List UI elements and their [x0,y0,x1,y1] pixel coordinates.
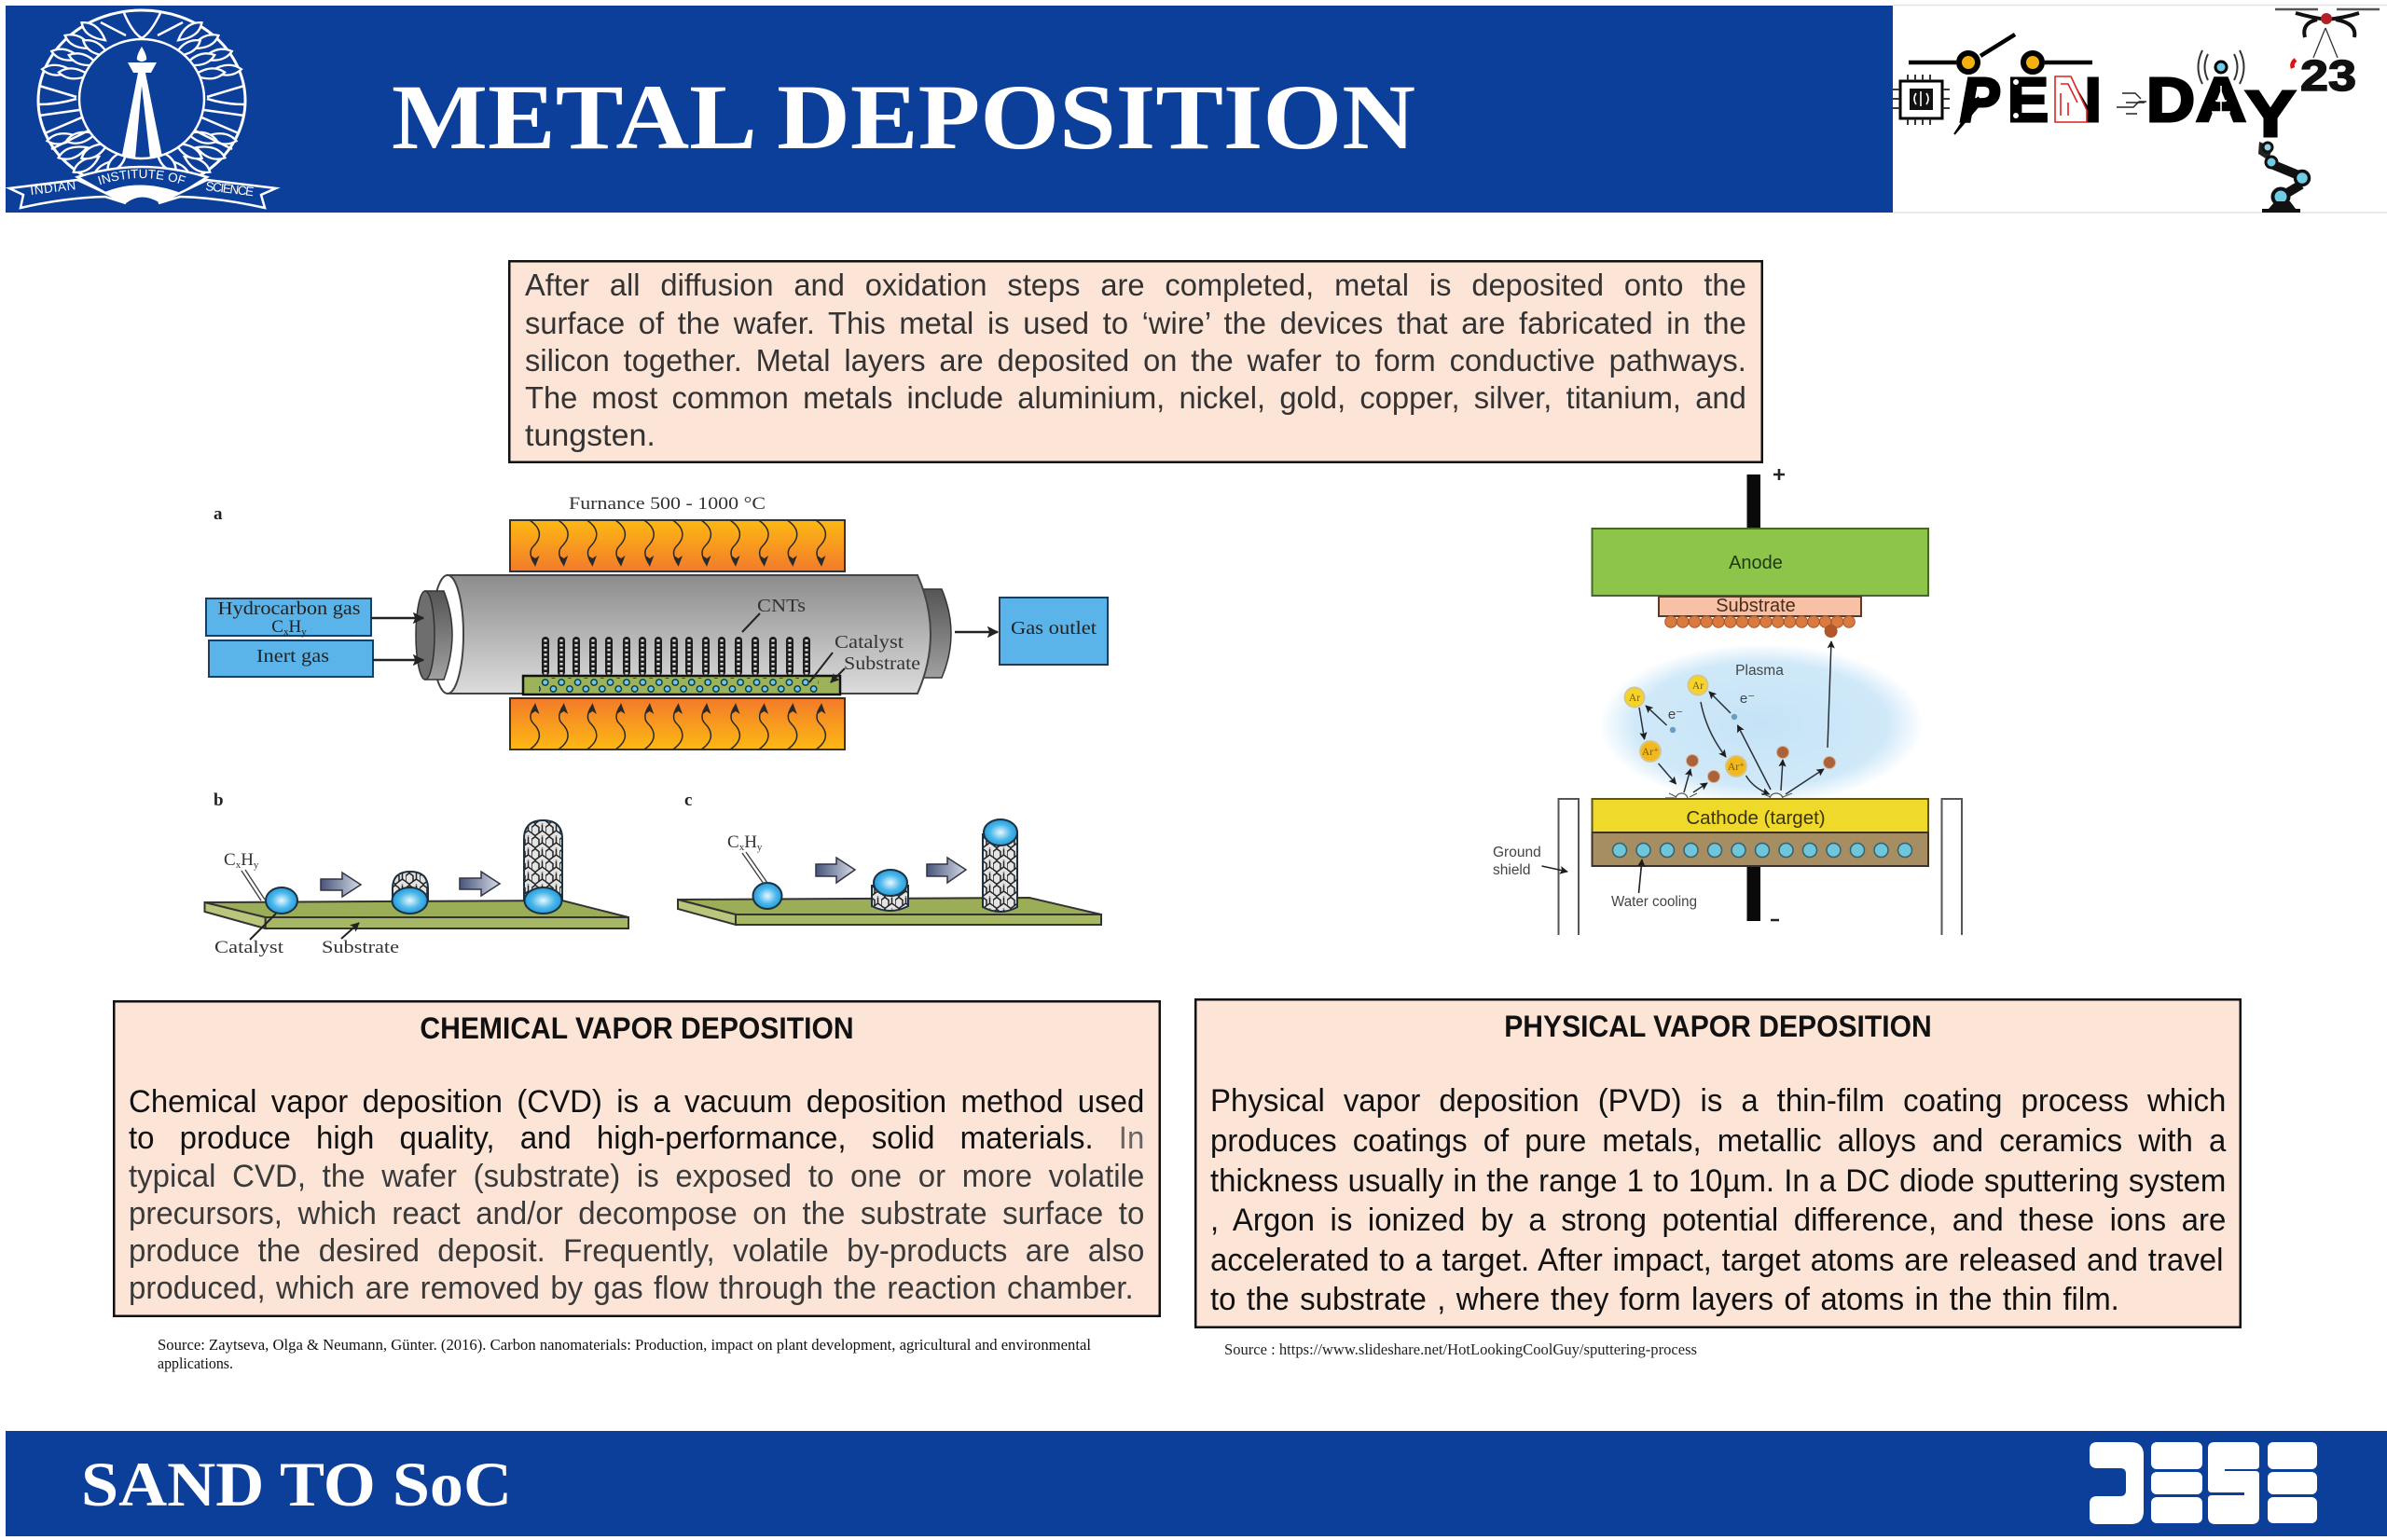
electrons [1668,691,1755,733]
logo: Open Day '23: A [2196,65,2246,135]
logo: Open Day '23: Y [2245,77,2296,150]
tube labels: CNTs [757,596,806,616]
substrate plate b [205,901,628,928]
label a: a [214,504,223,524]
panel: physical vapor deposition: Physical vapor deposition (PVD) is a thin-film coating process which [1210,1083,2226,1119]
tube labels [742,596,920,682]
heading: PVD: PHYSICAL VAPOR DEPOSITION [1504,1010,1932,1043]
electrons: e⁻ [1740,691,1755,707]
panel: chemical vapor deposition: typical CVD, the wafer (substrate) is exposed to one or more volatile [129,1159,1144,1194]
gas boxes: C [271,617,283,637]
gas boxes: y [301,626,307,638]
label c: c [684,791,692,810]
cathode target [1593,799,1928,832]
gas boxes: Gas outlet [1011,618,1097,639]
panel: chemical vapor deposition: produced, which are removed by gas flow through the reaction chamber. [129,1271,1134,1306]
labels b: y [254,859,259,871]
impact craters [1665,793,1796,799]
gas boxes: H [288,617,301,637]
gas boxes: x [283,626,289,638]
panel: introduction: surface of the wafer. This metal is used to ‘wire’ the devices that are fabricated in the [525,306,1746,340]
bottom heater [510,698,845,749]
ground shields [1559,799,1962,935]
CVD source note: applications. [158,1354,233,1372]
logo: Open Day '23 [1893,6,2387,213]
argon atoms and ions: Ar⁺ [1642,747,1659,758]
plasma cloud [1599,644,1924,804]
panel: introduction: silicon together. Metal layers are deposited on the wafer to form conductive pathways. [525,343,1746,378]
logo: Indian Institute of Science: INDIAN [30,178,76,198]
carbon nanotubes on substrate [523,637,840,694]
PVD sputtering diagram [1493,469,1962,935]
logo: Open Day '23: D [2146,65,2195,135]
panel: physical vapor deposition: produces coatings of pure metals, metallic alloys and ceramics with a [1210,1123,2226,1159]
CVD source note: Source: Zaytseva, Olga & Neumann, Günter. (2016). Carbon nanomaterials: Production, impact on plant development, agricultural and environmental [158,1336,1091,1354]
gas boxes: Hydrocarbon gas [218,598,361,619]
labels b: x [236,859,241,871]
ground shield label: Ground [1493,845,1541,860]
logo: department mark [2090,1442,2317,1524]
sputtered target atoms [1686,746,1835,783]
argon atoms and ions: Ar⁺ [1728,762,1745,773]
panel: physical vapor deposition: accelerated to a target. After impact, target atoms are released and travel [1210,1243,2223,1278]
panel: introduction: tungsten. [525,418,655,452]
substrate with deposited atoms: Substrate [1716,596,1796,616]
panel: chemical vapor deposition: precursors, which react and/or decompose on the substrate surface to [129,1196,1144,1231]
title: METAL DEPOSITION [392,65,1415,169]
PVD source note: Source : https://www.slideshare.net/HotLookingCoolGuy/sputtering-process [1224,1341,1697,1358]
logo: Indian Institute of Science [6,9,280,210]
logo: Open Day '23: N [2054,65,2102,135]
water cooling label: Water cooling [1611,894,1697,910]
growth stages b [266,820,562,914]
ground shield label: shield [1493,862,1531,878]
argon atoms and ions: Ar [1692,681,1704,692]
electrons: e⁻ [1668,707,1683,722]
substrate with deposited atoms [1659,596,1861,638]
panel: chemical vapor deposition: Chemical vapor deposition (CVD) is a vacuum deposition method used [129,1084,1144,1120]
label CxHy c [727,832,767,884]
anode [1593,529,1928,596]
footer bar [6,1431,2387,1536]
substrate plate c [678,898,1101,925]
gas flow arrows [371,618,998,660]
water cooling block [1593,832,1928,866]
logo: Open Day '23: E [2008,65,2049,135]
argon atoms and ions: Ar [1629,693,1640,704]
ground shield label [1493,845,1567,878]
label CxHy c: C [727,832,739,852]
panel: chemical vapor deposition [113,1000,1161,1317]
labels b: Substrate [322,938,399,957]
block arrows b [321,872,500,897]
argon atoms and ions [1624,675,1746,777]
CVD diagram c: base growth [678,791,1101,925]
logo: Open Day '23: P [1960,65,1999,135]
tube labels: Catalyst [835,632,904,653]
tube labels: Substrate [844,653,920,674]
cathode target: Cathode (target) [1686,807,1826,829]
panel: chemical vapor deposition: to produce high quality, and high-performance, solid materials. In [129,1121,1144,1156]
block arrows c [816,858,966,883]
CVD diagram a: furnace [206,494,1108,749]
anode: Anode [1729,553,1783,573]
top heater [510,520,845,571]
gas boxes: Inert gas [256,646,329,667]
labels b: C [224,850,236,870]
label CxHy c: y [757,842,763,853]
water cooling label [1611,859,1697,910]
panel: physical vapor deposition: to the substrate , where they form layers of atoms in the thin film. [1210,1282,2119,1317]
logo: Indian Institute of Science: INSTITUTE OF [98,170,186,185]
footer title: SAND TO SoC [81,1449,512,1519]
CVD diagram b: tip growth [205,791,628,957]
panel: physical vapor deposition: thickness usually in the range 1 to 10µm. In a DC diode sputtering system [1210,1163,2226,1199]
logo: Indian Institute of Science: SCIENCE [205,179,255,199]
gas boxes [206,598,1108,677]
label CxHy c: H [744,832,757,852]
header bar [6,6,1893,213]
panel: introduction: After all diffusion and oxidation steps are completed, metal is deposited onto the [525,268,1746,302]
panel: introduction [508,260,1763,463]
particle arrows [1639,641,1831,794]
label CxHy c: x [739,842,745,853]
furnace tube [416,575,951,694]
growth stages c [753,819,1017,912]
furnace label: Furnance 500 - 1000 °C [569,494,766,514]
labels b [214,850,399,957]
labels b: H [241,850,254,870]
panel: introduction: The most common metals include aluminium, nickel, gold, copper, silver, titanium, and [525,380,1746,415]
CVD source note [158,1336,1091,1372]
electrode bars [1747,469,1785,921]
panel: physical vapor deposition: , Argon is ionized by a strong potential difference, and these ions are [1210,1203,2226,1238]
logo: Open Day '23: 23 [2300,51,2356,100]
heading: CVD: CHEMICAL VAPOR DEPOSITION [420,1011,854,1045]
panel: physical vapor deposition [1194,998,2242,1328]
panel: chemical vapor deposition: produce the desired deposit. Frequently, volatile by-products are also [129,1233,1144,1269]
labels b: Catalyst [214,938,284,957]
plasma label: Plasma [1735,663,1784,679]
label b: b [214,791,224,810]
